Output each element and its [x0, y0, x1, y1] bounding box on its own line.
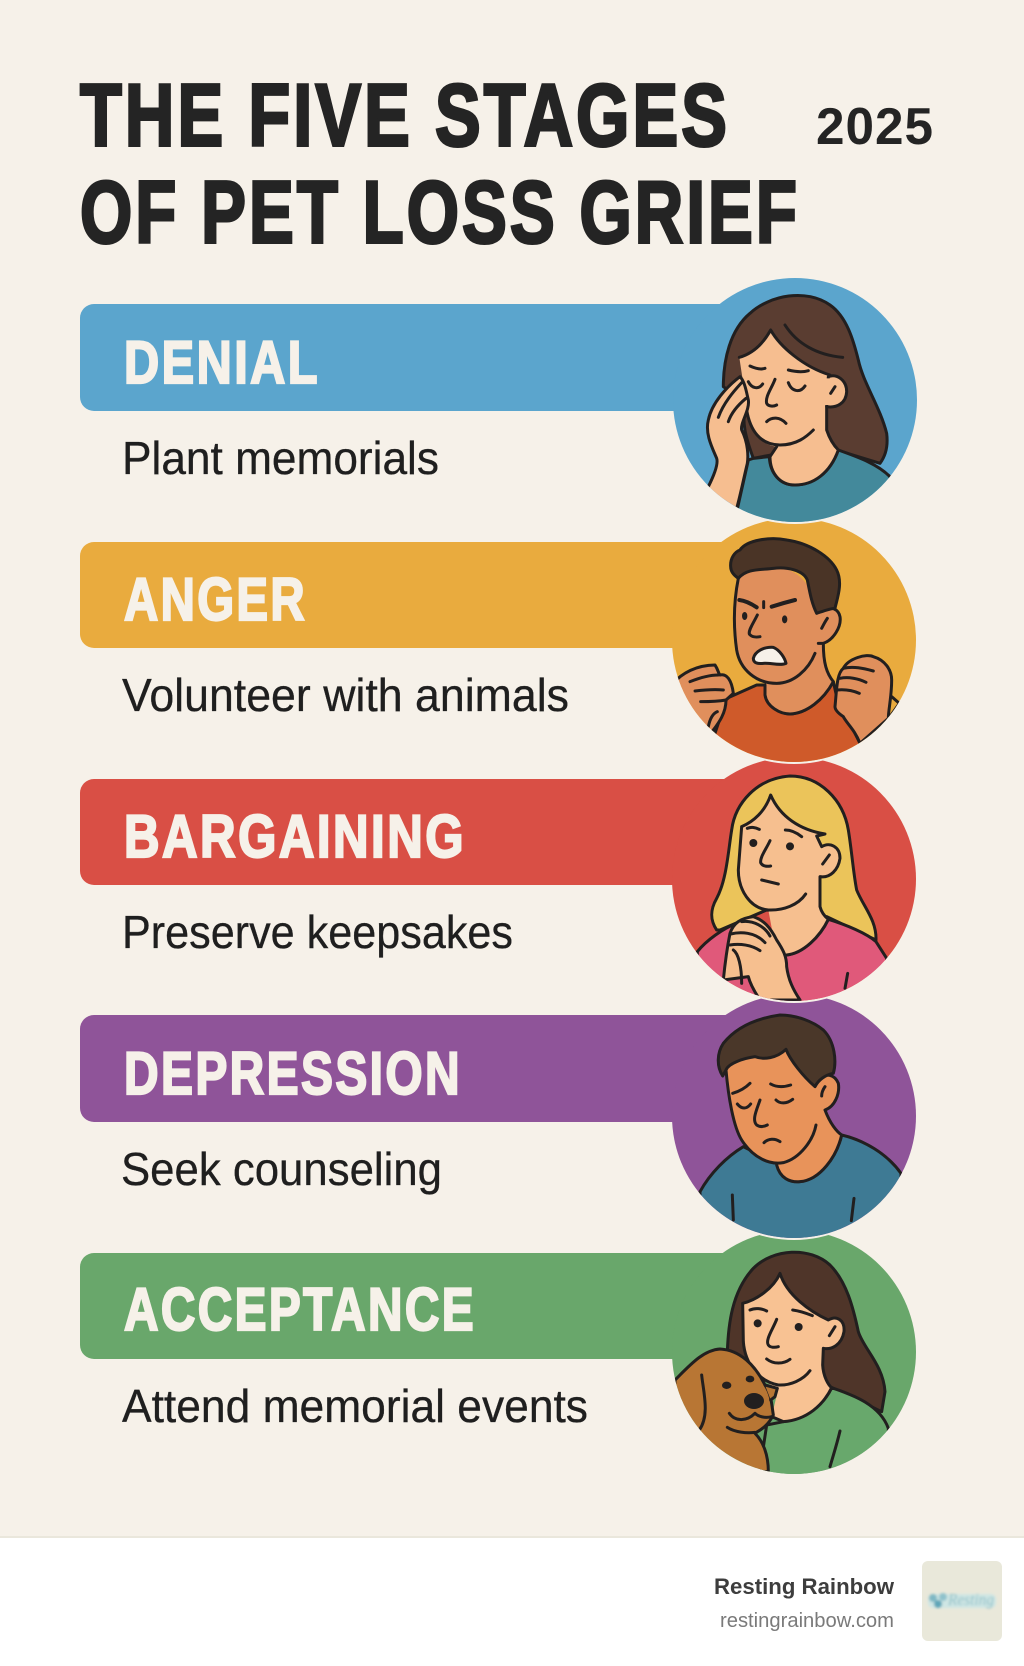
bargaining label: BARGAINING: [124, 803, 466, 870]
acceptance label: ACCEPTANCE: [124, 1276, 476, 1343]
brand url: restingrainbow.com: [720, 1610, 894, 1632]
icon: woman hugging dog: [673, 1252, 888, 1492]
icon: angry man with fists: [673, 539, 899, 777]
denial label: DENIAL: [124, 329, 320, 396]
anger action: Volunteer with animals: [122, 669, 569, 721]
brand name: Resting Rainbow: [714, 1574, 895, 1599]
title: OF PET LOSS GRIEF: [80, 162, 800, 262]
denial bar and circle: [80, 278, 917, 522]
gap ring: [670, 516, 918, 764]
logo: Resting: [947, 1590, 994, 1609]
icon: blonde woman praying: [697, 776, 887, 1017]
anger bar and circle: [80, 518, 916, 762]
depression action: Seek counseling: [121, 1143, 442, 1195]
title: [80, 66, 800, 262]
logo: [922, 1561, 1002, 1641]
anger label: ANGER: [124, 566, 307, 633]
icon: woman wiping eye: [707, 295, 890, 527]
panel: bargaining: [80, 755, 918, 1017]
gap ring: [670, 992, 918, 1240]
gap ring: [670, 755, 918, 1003]
bargaining action: Preserve keepsakes: [122, 906, 513, 958]
title: THE FIVE STAGES: [80, 66, 730, 164]
icon: man looking down: [700, 1015, 901, 1257]
panel: anger: [80, 516, 918, 777]
depression bar and circle: [80, 994, 916, 1238]
panel: depression: [80, 992, 918, 1257]
panel: acceptance: [80, 1230, 916, 1492]
bargaining bar and circle: [80, 757, 916, 1001]
denial action: Plant memorials: [122, 432, 439, 484]
footer: [0, 1536, 1024, 1666]
gap ring: [671, 276, 919, 524]
acceptance bar and circle: [80, 1230, 916, 1474]
panel: denial: [80, 276, 919, 527]
depression label: DEPRESSION: [124, 1040, 462, 1107]
year: 2025: [816, 98, 934, 156]
acceptance action: Attend memorial events: [122, 1380, 588, 1432]
